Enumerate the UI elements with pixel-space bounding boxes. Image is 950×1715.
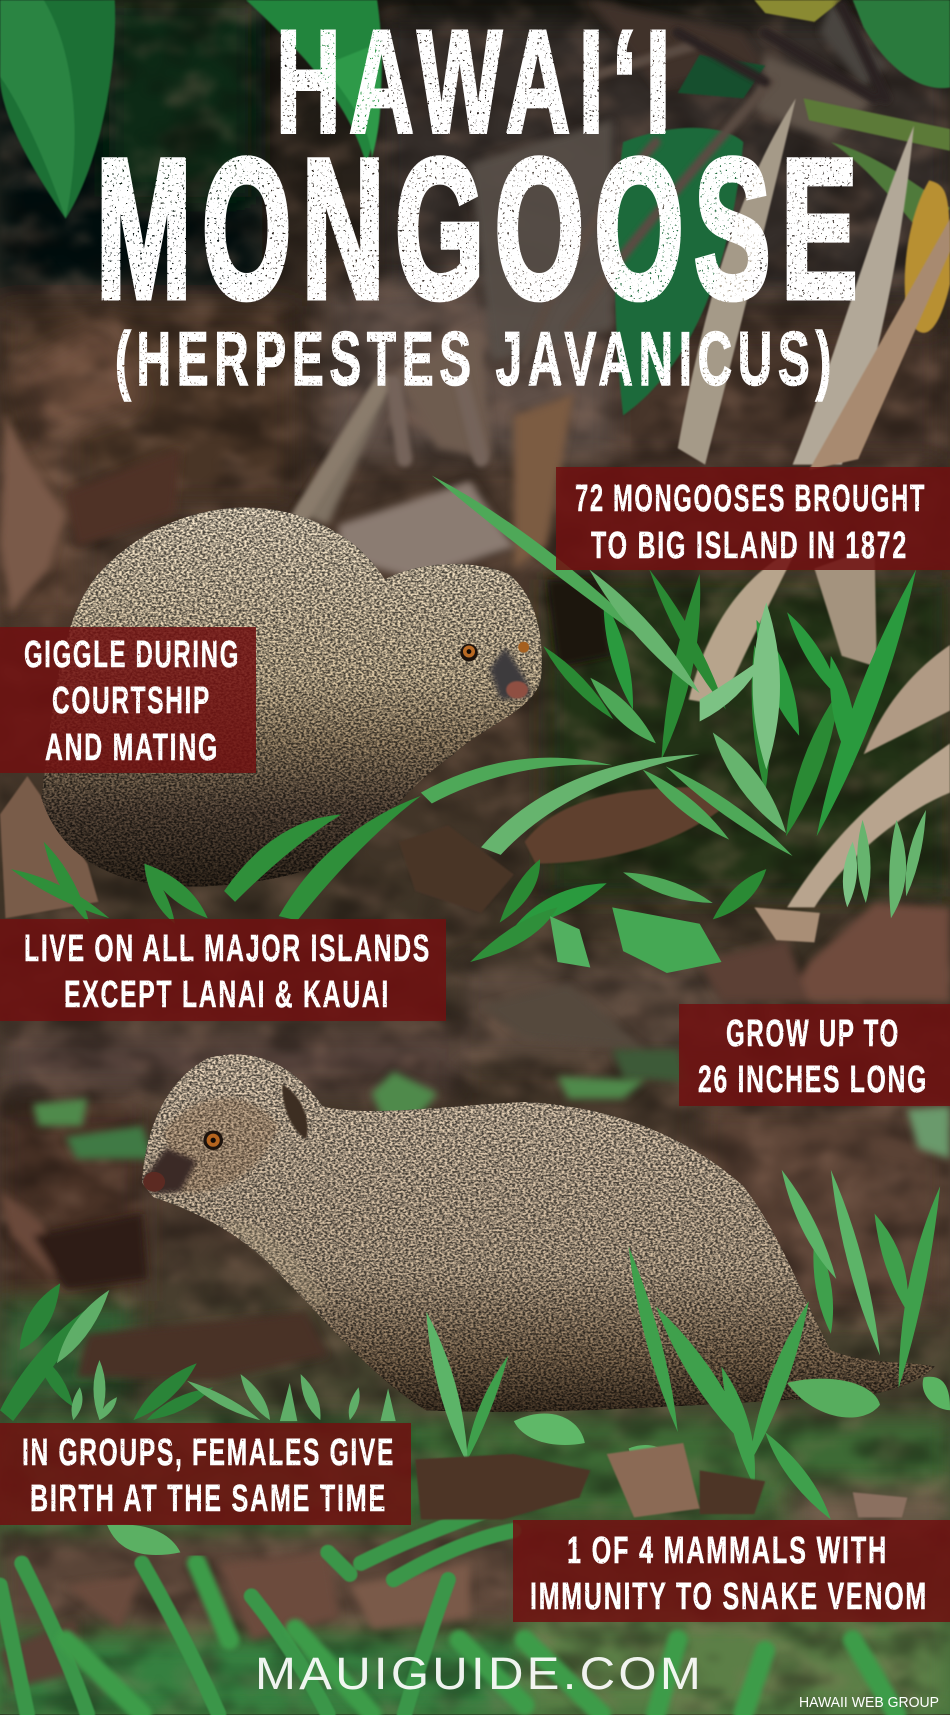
lower dense grass bbox=[0, 1170, 950, 1714]
head details bbox=[460, 642, 531, 700]
credit: HAWAII WEB GROUP bbox=[799, 1694, 939, 1711]
caption text: COURTSHIP bbox=[52, 680, 211, 722]
box: major islands bbox=[0, 919, 446, 1021]
face details bbox=[142, 1084, 328, 1307]
mongoose upper bbox=[42, 508, 542, 886]
pale dry leaves bbox=[0, 98, 950, 942]
mongoose lower bbox=[142, 1054, 935, 1412]
box: 72 mongooses bbox=[556, 467, 950, 570]
box: groups bbox=[0, 1423, 411, 1525]
red caption boxes bbox=[0, 467, 950, 1622]
site name: MAUIGUIDE.COM bbox=[255, 1648, 704, 1699]
grass blades bbox=[0, 476, 950, 1714]
caption text: LIVE ON ALL MAJOR ISLANDS bbox=[24, 928, 431, 970]
box: giggle bbox=[0, 627, 256, 773]
title bbox=[96, 0, 868, 402]
caption text: BIRTH AT THE SAME TIME bbox=[30, 1478, 387, 1520]
upper dense grass bbox=[11, 476, 926, 973]
box: grow up bbox=[679, 1004, 950, 1106]
brown fallen leaves lower bbox=[415, 1443, 907, 1520]
dry blades at top bbox=[295, 5, 885, 525]
caption text bbox=[22, 478, 928, 1618]
tropical leaves at top bbox=[0, 0, 950, 415]
caption text: IN GROUPS, FEMALES GIVE bbox=[22, 1432, 395, 1474]
caption text: AND MATING bbox=[45, 727, 219, 769]
caption text: GIGGLE DURING bbox=[24, 634, 240, 676]
title: HAWAI‘I bbox=[276, 0, 679, 163]
caption text: EXCEPT LANAI & KAUAI bbox=[64, 974, 390, 1016]
box: snake venom bbox=[513, 1520, 950, 1622]
